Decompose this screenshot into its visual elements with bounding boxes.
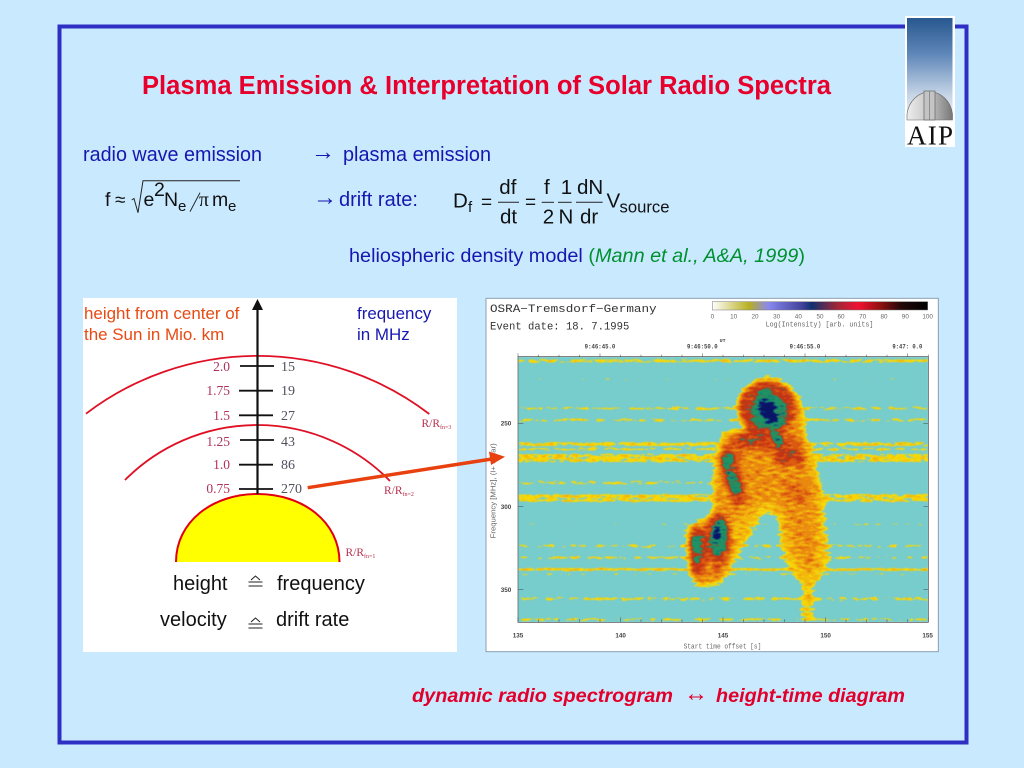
frequency axis: 250 [501,421,512,428]
title: Plasma Emission & Interpretation of Solar Radio Spectra [142,72,832,100]
burst cores [692,390,787,563]
sun [176,494,340,562]
colour scale: 70 [859,314,867,321]
formula: drift rate: = [481,192,492,214]
arc labels: R/R [346,547,364,559]
formula: drift rate: df [499,176,517,199]
formula: plasma frequency: π [199,190,209,211]
label: frequency axis caption: frequency [357,304,432,323]
time axis: Start time offset [s] [684,643,761,651]
formula: plasma frequency: f [105,189,111,211]
spectrogram heading [490,304,657,333]
frequency values: 27 [281,409,295,424]
frequency axis: 300 [501,504,512,511]
time axis: 155 [922,632,933,639]
spectrogram heading: OSRA−Tremsdorf−Germany [490,304,657,316]
caption: spectrogram vs height-time [412,681,905,707]
colour scale: 30 [773,314,781,321]
text: radio wave emission: radio wave emission [83,144,262,166]
logo: AIP [905,16,955,150]
height values: 1.75 [206,383,230,398]
time labels: 9:46:45.0 [585,343,616,350]
frequency values [281,360,302,497]
colour scale: 100 [922,314,933,321]
burst body [685,378,830,620]
formula: plasma frequency: e [228,198,236,215]
panel: height diagram [83,298,457,652]
frequency axis [489,421,928,594]
time axis [513,353,933,651]
panel: spectrogram [486,298,938,652]
axis arrow [252,299,263,494]
text: drift rate: → [313,185,337,211]
colour scale: 40 [795,314,802,321]
arc labels: fn=3 [440,424,451,431]
formula: drift rate: 2 [543,205,554,228]
text: heliospheric density model: heliospheric density model (Mann et al., A&A, 1999) [349,245,805,267]
caption: spectrogram vs height-time: dynamic radio spectrogram [412,685,673,707]
time labels: 9:46:50.0 [687,343,718,350]
sun outline [176,494,340,562]
caption: spectrogram vs height-time: height-time diagram [716,685,905,707]
formula: plasma frequency: N [164,189,178,211]
formula: drift rate: source [620,198,670,216]
formula: drift rate: dr [580,205,598,228]
formula: plasma frequency: e [178,198,186,215]
time axis: 150 [820,632,831,639]
formula: drift rate: D [453,190,468,212]
colour scale: 50 [816,314,824,321]
formula: drift rate [453,176,670,228]
frequency values: 19 [281,384,295,399]
formula: plasma frequency: e [144,189,154,211]
height values: 0.75 [206,481,230,496]
colour scale: 0 [711,314,715,321]
formula: drift rate: V [606,190,620,212]
arrow: 270 MHz to spectrogram [308,452,505,488]
equivalence: velocity drift rate [160,609,349,631]
frequency values: 270 [281,482,302,497]
colour scale [711,302,933,330]
height values: 1.0 [213,457,230,472]
colour scale: 80 [880,314,888,321]
formula: drift rate: dt [500,205,517,228]
formula: drift rate: f [468,199,473,216]
arc labels [346,418,451,560]
arc: n=2 level [125,425,390,481]
colour scale: 60 [837,314,845,321]
frequency values: 43 [281,435,295,450]
arc labels: R/R [384,485,403,497]
equivalence: height frequency [173,573,365,595]
arc labels: fn=1 [364,553,375,560]
caption: spectrogram vs height-time: ↔ [684,681,708,707]
frequency axis: Frequency [MHz], (I+ Solar) [489,443,498,538]
plot border [518,357,928,622]
colour scale: Log(Intensity) [arb. units] [766,322,873,330]
frequency values: 15 [281,360,295,375]
equivalence: height frequency: height [173,573,228,595]
spectrogram heading: Event date: 18. 7.1995 [490,321,629,333]
burst peaks [713,399,777,541]
arc labels: R/R [422,418,440,430]
label: height axis caption: the Sun in Mio. km [84,325,224,344]
noise bands [518,359,928,621]
colour scale: 20 [751,314,759,321]
equivalence: velocity drift rate: velocity [160,609,227,631]
height values: 1.5 [213,408,230,423]
height values [206,359,230,496]
axis ticks [239,366,274,489]
height values: 2.0 [213,359,230,374]
formula: plasma frequency [105,179,240,215]
formula: drift rate: 1 [561,176,572,199]
frequency values: 86 [281,458,295,473]
label: height axis caption: height from center of [84,304,240,323]
time labels: 9:46:55.0 [790,343,821,350]
arc labels: fn=2 [403,491,414,498]
colour scale: 90 [902,314,909,321]
text: drift rate: drift rate: [339,189,418,211]
equivalence: height frequency: frequency [277,573,365,595]
height values: 1.25 [206,434,230,449]
text: drift rate [313,185,418,211]
time labels [585,338,922,350]
text: plasma emission: plasma emission [343,144,491,166]
time labels: 9:47: 0.0 [892,343,922,350]
label: frequency axis caption: in MHz [357,325,410,344]
time axis: 140 [615,632,626,639]
formula: plasma frequency: 2 [154,179,165,201]
formula: plasma frequency: ≈ [115,190,125,211]
plot area: intensity map [518,357,928,622]
formula: drift rate: f [544,176,550,199]
logo: AIP: AIP [907,120,953,150]
colour scale: 10 [730,314,738,321]
formula: drift rate: N [558,205,573,228]
formula: drift rate: dN [577,176,603,199]
arc: n=3 level [86,356,429,414]
time labels: UT [720,338,726,344]
equivalence: velocity drift rate: drift rate [276,609,349,631]
arrow: to plasma emission: → [311,140,335,166]
formula: drift rate: = [525,192,536,214]
time axis: 145 [718,632,729,639]
formula: plasma frequency: m [212,189,228,211]
time axis: 135 [513,632,524,639]
frequency axis: 350 [501,587,512,594]
